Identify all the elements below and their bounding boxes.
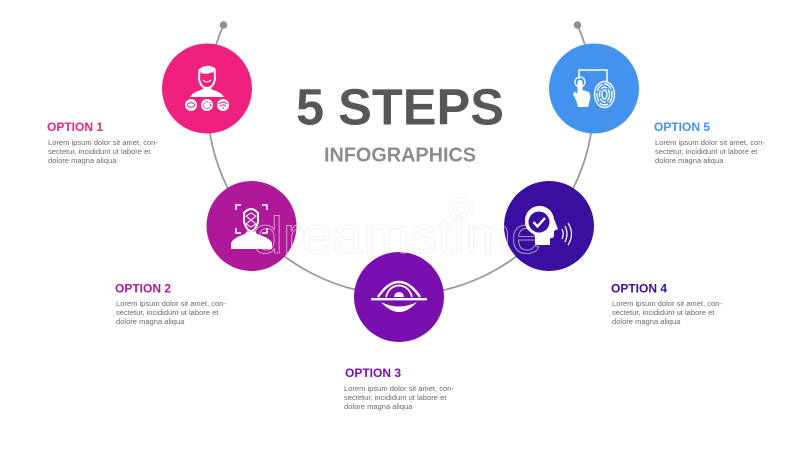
option 4 text: dolore magna aliqua	[612, 317, 681, 326]
option 5 text: Lorem ipsum dolor sit amet, con-	[655, 138, 765, 147]
option 4 text: Lorem ipsum dolor sit amet, con-	[612, 299, 722, 308]
icon: head with check and sound waves	[525, 206, 572, 245]
step 3 circle	[354, 252, 444, 342]
option 1 text: sectetur, incididunt ut labore et	[48, 147, 151, 156]
option 2 text: dolore magna aliqua	[116, 317, 185, 326]
option 1 text: dolore magna aliqua	[48, 156, 117, 165]
option 3 text: sectetur, incididunt ut labore et	[344, 393, 447, 402]
option 1 text: Lorem ipsum dolor sit amet, con-	[48, 138, 158, 147]
connector arc with end dots	[207, 21, 593, 295]
icon: touch screen fingerprint	[573, 70, 614, 108]
option 2 text: OPTION 2	[115, 282, 171, 296]
option 1 text: OPTION 1	[47, 120, 103, 134]
watermark: dreamstime	[252, 207, 542, 265]
option 5 text: dolore magna aliqua	[655, 156, 724, 165]
option 3 text	[344, 366, 454, 411]
option 2 text: Lorem ipsum dolor sit amet, con-	[116, 299, 226, 308]
title: 5 STEPS	[296, 78, 504, 136]
option 4 text: sectetur, incididunt ut labore et	[612, 308, 715, 317]
option 3 text: dolore magna aliqua	[344, 402, 413, 411]
step 2 circle	[206, 181, 296, 271]
option 5 text	[654, 120, 765, 165]
step 1 circle	[162, 44, 252, 134]
option 2 text	[115, 282, 226, 326]
option 4 text	[611, 282, 722, 326]
step 4 circle	[504, 181, 594, 271]
option 5 text: sectetur, incididunt ut labore et	[655, 147, 758, 156]
icon: face scan	[231, 205, 272, 249]
step 5 circle	[549, 44, 639, 134]
option 5 text: OPTION 5	[654, 120, 710, 134]
option 4 text: OPTION 4	[611, 282, 667, 296]
icon: person with biometrics	[185, 66, 229, 111]
option 3 text: Lorem ipsum dolor sit amet, con-	[344, 384, 454, 393]
option 2 text: sectetur, incididunt ut labore et	[116, 308, 219, 317]
option 1 text	[47, 120, 158, 165]
subtitle: INFOGRAPHICS	[324, 144, 476, 166]
option 3 text: OPTION 3	[345, 366, 401, 380]
icon: eye	[371, 282, 427, 312]
